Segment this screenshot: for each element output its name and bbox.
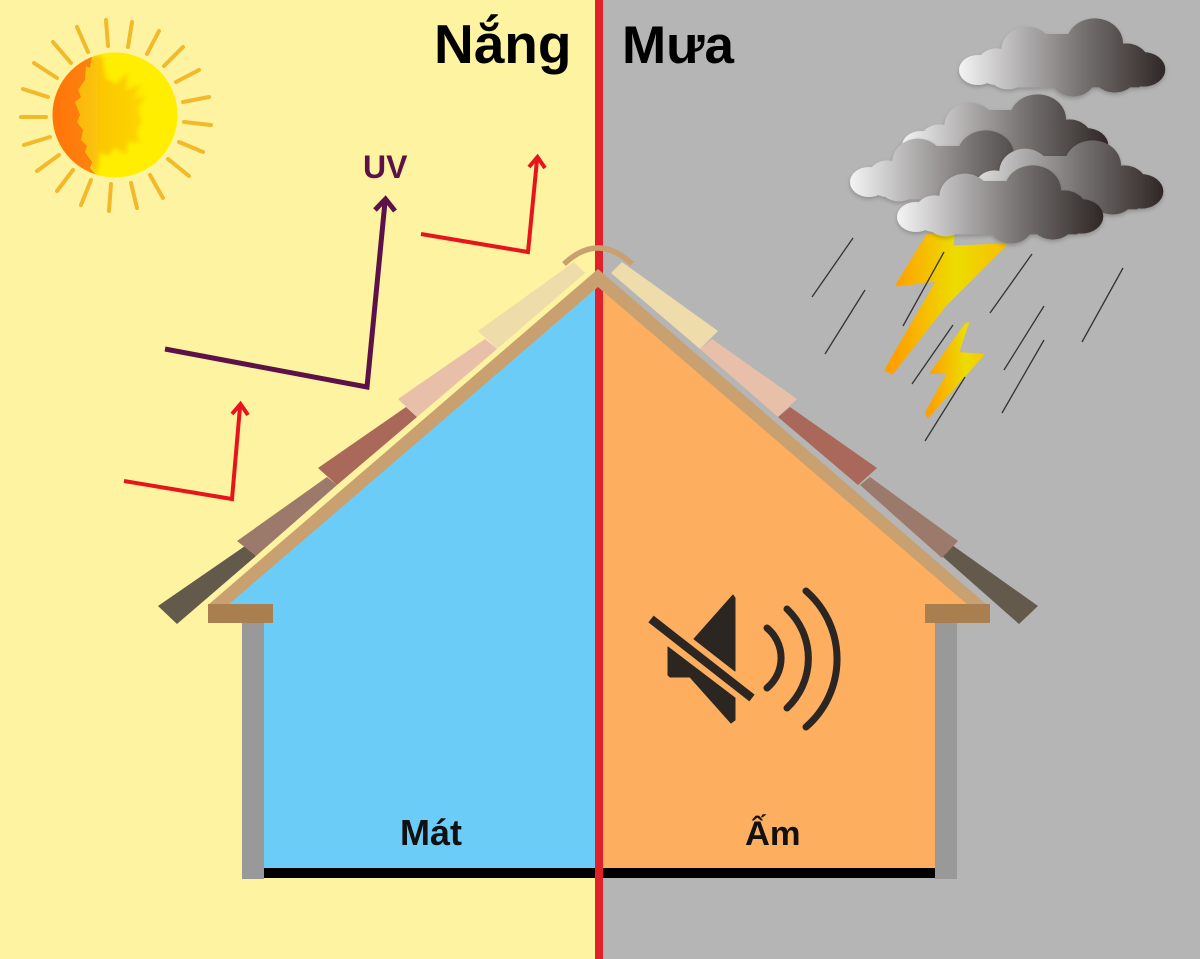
panel: cool interior xyxy=(228,287,598,868)
cloud front xyxy=(897,165,1103,244)
cloud top xyxy=(959,18,1165,97)
right eave board xyxy=(925,604,990,623)
panel: rainy background xyxy=(598,0,1200,959)
floor xyxy=(264,868,935,878)
icon: sun xyxy=(21,20,211,211)
arrow: UV ray xyxy=(165,199,395,387)
lightning bolt large xyxy=(886,235,1005,373)
divider over floor xyxy=(595,868,603,959)
left eave board xyxy=(208,604,273,623)
arrow: red heat ray high xyxy=(421,157,545,252)
cloud right xyxy=(957,140,1163,219)
cloud left xyxy=(850,130,1056,209)
label: UV: UV xyxy=(363,149,408,185)
panel: sunny background xyxy=(0,0,598,959)
icon: noise blocked speaker xyxy=(651,591,837,727)
left roof beam xyxy=(208,269,598,605)
heading: Mưa: Mưa xyxy=(622,16,735,75)
cloud behind xyxy=(902,94,1108,173)
heading: Nắng: Nắng xyxy=(434,13,572,75)
label: Mát: Mát xyxy=(400,812,462,853)
left wall xyxy=(242,620,264,879)
right wall xyxy=(935,620,957,879)
ridge cap xyxy=(564,248,632,264)
rain lines xyxy=(812,238,1123,441)
arrow: red heat ray low xyxy=(124,404,248,499)
left roof tiles xyxy=(158,262,585,624)
lightning bolt small xyxy=(926,323,983,417)
red divider line xyxy=(595,0,603,959)
right roof beam xyxy=(598,269,987,605)
panel: warm interior xyxy=(598,287,968,868)
label: Ấm: Ấm xyxy=(745,813,801,853)
right roof tiles xyxy=(611,262,1038,624)
